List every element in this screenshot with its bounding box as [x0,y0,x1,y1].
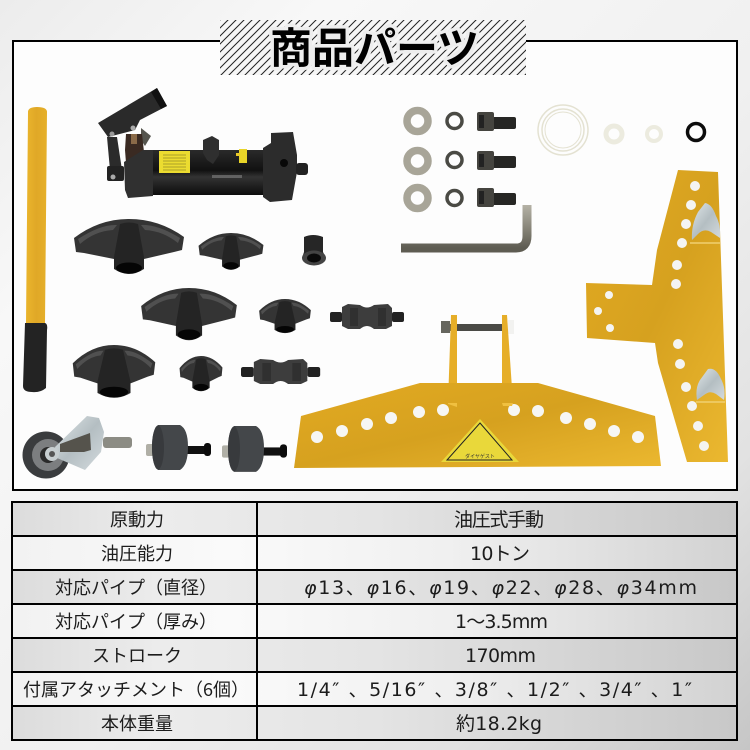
large clear ring [538,105,588,155]
row: hydraulic capacity: 10トン [470,543,530,565]
roller B [222,426,287,472]
row: pipe diameter [55,574,697,600]
row: attachments [23,676,692,702]
left collar [124,150,153,198]
die 6 [180,356,222,391]
pipe rollers [241,304,404,384]
row: pipe thickness: 1～3.5mm [455,611,548,633]
row: hydraulic capacity [101,540,530,566]
row: stroke [92,642,536,668]
bushing [302,235,326,266]
die 4 [259,299,311,333]
die 2 [199,233,263,270]
mounting uprights and bolt [441,315,514,403]
lower silver bracket [696,369,725,400]
right collar [263,132,297,202]
small label [239,149,247,163]
small clear ring [647,127,661,141]
title: 商品パーツ [270,15,479,76]
caster wheel [22,416,132,478]
angle gauge triangle: ダイヤゲスト [465,453,495,460]
row: attachments: 付属アタッチメント（6個） [23,676,249,702]
row: power source [110,506,544,532]
angle gauge triangle [441,419,519,462]
row: weight [101,710,542,736]
row: pipe thickness [55,608,548,634]
title band [220,15,526,76]
die 1 [74,219,184,274]
roller A [146,425,211,470]
row: weight: 本体重量 [101,710,173,736]
black o-ring [688,124,704,140]
row: pipe diameter: φ13、φ16、φ19、φ22、φ28、φ34mm [304,577,697,599]
cylinder body [153,150,267,195]
row: power source: 原動力 [110,506,164,532]
upper silver bracket [692,203,720,240]
row: power source: 油圧式手動 [454,509,544,531]
hydraulic pump [98,88,308,202]
bending dies [73,219,311,398]
row: stroke: 170mm [465,645,536,667]
row: pipe thickness: 対応パイプ（厚み） [55,608,217,634]
spec table [12,502,737,740]
die 5 [73,345,155,398]
filler plug [203,136,219,164]
row: weight: 約18.2kg [456,713,542,735]
row: pipe diameter: 対応パイプ（直径） [55,574,217,600]
hardware: washers and bolts [407,110,516,208]
pull rollers with bolts [146,425,287,472]
row: stroke: ストローク [92,642,182,668]
valve [141,128,151,146]
rubber grip [23,323,47,392]
seal rings [538,105,704,155]
die 3 [141,288,237,340]
hex key [401,205,527,248]
panel: product parts frame [13,41,737,490]
yellow label [159,151,190,173]
row: attachments: 1/4″ 、5/16″ 、3/8″ 、1/2″ 、3/4″ 、1″ [297,679,692,701]
medium clear ring [606,126,622,142]
row: hydraulic capacity: 油圧能力 [101,540,173,566]
roller 1 [330,304,404,329]
handle [23,107,47,392]
yellow T plate [586,170,728,462]
yellow base plate [294,315,661,468]
pump lever [98,88,167,137]
roller 2 [241,359,320,384]
lever link [107,137,122,170]
